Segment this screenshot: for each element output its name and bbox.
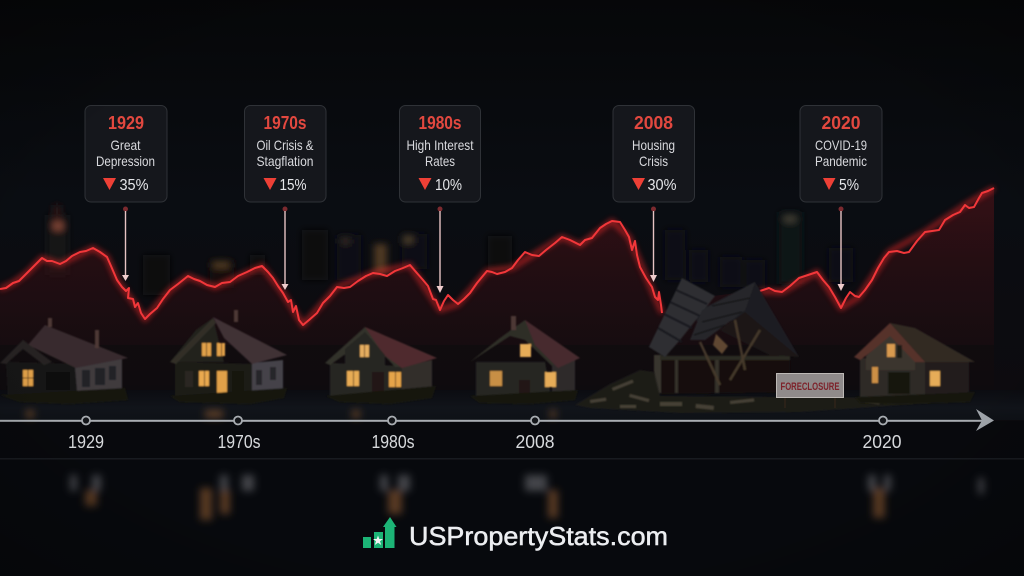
logo icon: rising bars bbox=[363, 517, 396, 548]
callout: 2020 bbox=[800, 106, 882, 202]
house: 2020 bbox=[854, 323, 975, 404]
foreclosure sign: FORECLOSURE bbox=[780, 381, 840, 393]
callout: 1970s: 1970s bbox=[264, 113, 306, 133]
price chart: area under line bbox=[0, 188, 994, 395]
blurred city skyline bbox=[47, 205, 853, 295]
callout: 1970s: Stagflation bbox=[256, 153, 314, 169]
callout: 2008 bbox=[613, 106, 694, 202]
red price line right bbox=[760, 188, 994, 308]
timeline labels: 2020 bbox=[862, 432, 902, 452]
timeline labels: 1929 bbox=[68, 432, 104, 452]
callout: 1980s: 1980s bbox=[418, 113, 462, 133]
callout: 2008: Housing bbox=[632, 137, 675, 153]
timeline arrowhead bbox=[976, 409, 994, 431]
arrow: 1929 bbox=[122, 206, 129, 281]
callout: 1929: Depression bbox=[96, 153, 155, 169]
timeline labels: 2008 bbox=[516, 432, 554, 452]
red price line bbox=[0, 221, 662, 325]
callout: 1980s bbox=[400, 106, 480, 202]
house: 1929 bbox=[0, 318, 128, 404]
reflective floor bbox=[0, 460, 1024, 576]
timeline labels: 1970s bbox=[218, 432, 260, 452]
callout: 1929: Great bbox=[110, 137, 141, 153]
arrow: 1980s bbox=[436, 206, 444, 293]
callout: 1980s: High Interest bbox=[406, 137, 474, 153]
timeline labels bbox=[68, 432, 902, 452]
callout: 1970s: Oil Crisis & bbox=[256, 137, 314, 153]
floor edge bbox=[0, 458, 1024, 460]
callout: 2020: Pandemic bbox=[815, 153, 867, 169]
callout: 1980s: 10% bbox=[435, 177, 462, 194]
timeline axis bbox=[0, 409, 994, 431]
callout: 2008: Crisis bbox=[639, 153, 668, 169]
callout: 2008: 2008 bbox=[634, 113, 673, 133]
callout: 2020: COVID-19 bbox=[815, 137, 867, 153]
callout: 2020: 5% bbox=[839, 177, 859, 194]
callout: 1929 bbox=[85, 106, 167, 202]
callout: 1929: 35% bbox=[120, 177, 148, 194]
callout: 1970s: 15% bbox=[280, 177, 306, 194]
callout: 1929: 1929 bbox=[108, 113, 144, 133]
arrow: 1970s bbox=[282, 206, 288, 290]
floor reflections bbox=[26, 410, 984, 520]
callout: 2008: 30% bbox=[648, 177, 676, 194]
logo wordmark: USPropertyStats.com bbox=[409, 521, 668, 551]
callout: 1970s bbox=[244, 106, 326, 202]
timeline nodes bbox=[82, 416, 887, 424]
arrow: 2008 bbox=[650, 206, 657, 282]
arrow: 2020 bbox=[838, 206, 844, 291]
floor strip behind houses bbox=[0, 390, 1024, 420]
collapsed house bbox=[649, 278, 799, 394]
dark backdrop band behind houses bbox=[0, 345, 994, 395]
timeline labels: 1980s bbox=[372, 432, 414, 452]
price line glow right bbox=[760, 188, 994, 308]
price line glow bbox=[0, 221, 662, 325]
house: 1980s bbox=[325, 327, 437, 404]
rubble pile bbox=[575, 370, 930, 413]
house: 1970s bbox=[170, 310, 287, 404]
callout: 1980s: Rates bbox=[425, 153, 455, 169]
callout: 2020: 2020 bbox=[822, 113, 860, 133]
lower band bbox=[0, 421, 1024, 458]
house: 2008 era bbox=[470, 316, 580, 404]
foreclosure sign bbox=[776, 374, 844, 408]
